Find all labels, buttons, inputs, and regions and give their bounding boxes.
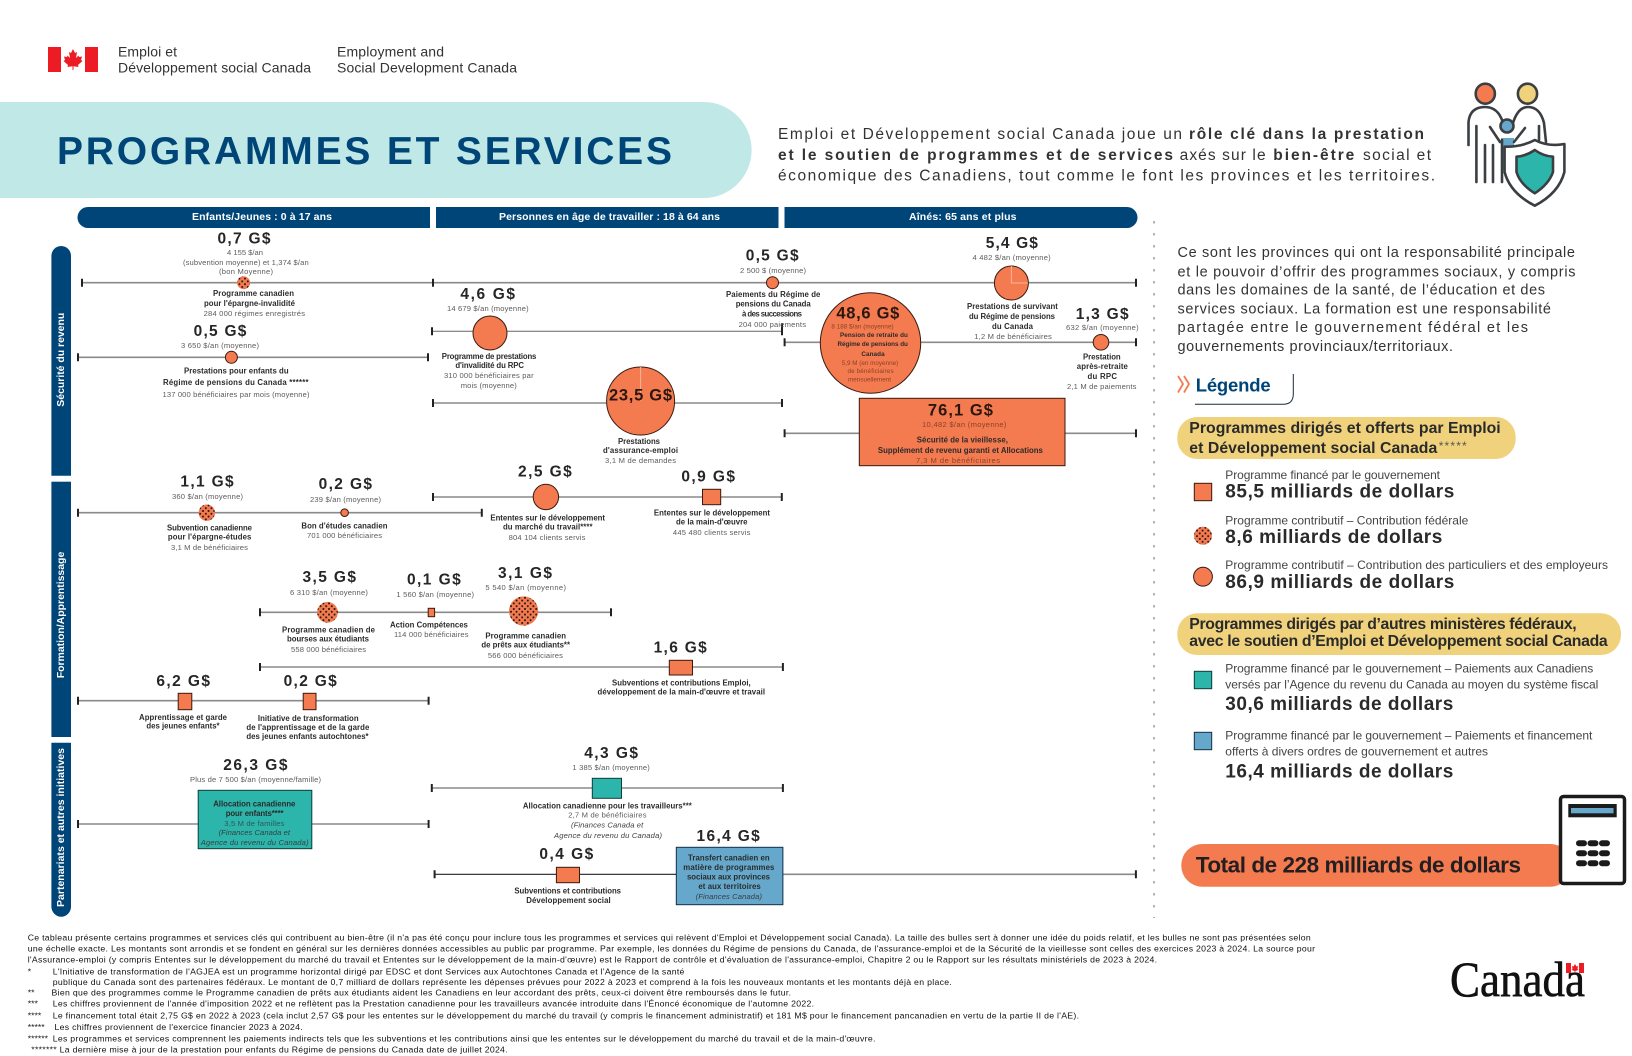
- icon: family with shield: [1468, 84, 1564, 206]
- program: Prestations d'assurance-emploi: Prestations: [618, 437, 661, 446]
- program: Programme canadien de bourses aux étudiants: 6 310 $/an (moyenne): [290, 588, 368, 597]
- legend group: programmes EDSC: *****: [1439, 439, 1467, 453]
- program: Sécurité de la vieillesse: [859, 398, 1065, 466]
- footnotes: ******: [28, 1034, 49, 1044]
- program: Transfert canadien en matière de programmes sociaux: 16,4 G$: [696, 828, 760, 845]
- timeline: transferts: [435, 870, 1136, 878]
- program: Transfert canadien en matière de programmes sociaux: Transfert canadien en: [688, 854, 770, 862]
- program: Subvention canadienne pour l'épargne-études: 360 $/an (moyenne): [172, 492, 243, 501]
- program: Programme canadien pour l'épargne-invalidité: [183, 230, 309, 318]
- footnotes: **: [28, 987, 35, 997]
- program: Allocation canadienne pour enfants: pour enfants****: [226, 809, 285, 818]
- program: Initiative de transformation AGJEA: de l'apprentissage et de la garde: [246, 723, 370, 732]
- legend group: autres ministères: [1177, 613, 1621, 655]
- program: Allocation canadienne pour enfants: Allocation canadienne: [213, 800, 296, 808]
- program: Allocation canadienne pour les travailleurs: Allocation canadienne pour les travailleurs***: [523, 802, 693, 810]
- program: Sécurité de la vieillesse: Sécurité de la vieillesse,: [917, 436, 1008, 444]
- program: Prestations de survivant du RPC: 5,4 G$: [986, 235, 1038, 252]
- program: Programme de prestations d'invalidité du RPC: 4,6 G$: [460, 286, 515, 303]
- program: Programme canadien pour l'épargne-invalidité: 284 000 régimes enregistrés: [204, 309, 305, 318]
- panel: Formation/Apprentissage: [51, 464, 783, 741]
- program: Programme canadien pour l'épargne-invalidité: pour l'épargne-invalidité: [204, 299, 296, 308]
- program: Prestations d'assurance-emploi: 3,1 M de demandes: [605, 456, 676, 465]
- program: Programme canadien de prêts aux étudiants: 5 540 $/an (moyenne): [485, 583, 566, 592]
- total callout: Total de 228 milliards de dollars: [1196, 852, 1521, 878]
- program: Programme canadien pour l'épargne-invalidité: Programme canadien: [213, 289, 294, 298]
- program: Prestation après-retraite du RPC: Prestation: [1083, 352, 1121, 362]
- program: Programme canadien de prêts aux étudiants: 566 000 bénéficiaires: [488, 651, 563, 660]
- program: Allocation canadienne pour les travailleurs: 1 385 $/an (moyenne): [572, 763, 650, 772]
- program: Prestation après-retraite du RPC: après-retraite: [1077, 362, 1129, 371]
- program: Prestations pour enfants du RPC: 3 650 $/an (moyenne): [181, 341, 259, 350]
- intro text: et le soutien de programmes et de services: [778, 147, 1173, 164]
- program: Allocation canadienne pour les travailleurs: (Finances Canada et: [571, 820, 644, 830]
- intro text: rôle clé dans la prestation: [1189, 126, 1424, 143]
- program: Ententes sur le développement du marché du travail: [490, 464, 605, 542]
- program: Bon d'études canadien: 0,2 G$: [319, 476, 372, 493]
- program: Transfert canadien en matière de programmes sociaux: matière de programmes: [683, 863, 775, 872]
- program: Prestation après-retraite du RPC: du RPC: [1088, 372, 1117, 381]
- program: Action Compétences: 0,1 G$: [407, 572, 461, 588]
- program: Ententes sur le développement du marché du travail: 804 104 clients servis: [509, 533, 586, 542]
- program: Ententes sur le développement du marché du travail: Ententes sur le développement: [490, 514, 605, 522]
- icon: calculator: [1560, 796, 1624, 884]
- program: Programme canadien de prêts aux étudiants: de prêts aux étudiants**: [481, 640, 571, 650]
- program: Bon d'études canadien: 239 $/an (moyenne): [310, 495, 381, 504]
- program: Allocation canadienne pour les travailleurs: 2,7 M de bénéficiaires: [568, 810, 647, 820]
- legend item: contribution fédérale: [1194, 513, 1469, 548]
- right text: responsabilité des provinces: gouvernements provinciaux/territoriaux.: [1178, 339, 1453, 355]
- program: Programme canadien de bourses aux étudiants: 558 000 bénéficiaires: [291, 645, 366, 654]
- title banner: [0, 102, 752, 198]
- program: Prestations pour enfants du RPC: Prestations pour enfants du: [184, 366, 289, 376]
- program: Sécurité de la vieillesse: 7,3 M de bénéficiaires: [916, 456, 1000, 465]
- program: Programme canadien pour l'épargne-invalidité: 4 155 $/an: [227, 248, 263, 257]
- footnotes: Les chiffres proviennent de l'exercice financier 2023 à 2024.: [54, 1022, 303, 1032]
- program: Sécurité de la vieillesse: 76,1 G$: [928, 402, 993, 420]
- program: Paiements du RPC à des successions: pensions du Canada: [736, 300, 811, 308]
- English department name: Employment and: [337, 44, 444, 60]
- intro text: axés sur le: [1180, 147, 1266, 164]
- header: Enfants/Jeunes: [78, 207, 430, 228]
- French department name: Emploi et: [118, 44, 177, 60]
- program: Allocation canadienne pour les travailleurs: 4,3 G$: [584, 745, 638, 762]
- legend item: paiements aux Canadiens: [1194, 662, 1598, 715]
- program: Prestations pour enfants du RPC: 0,5 G$: [194, 323, 247, 340]
- intro text: Emploi et Développement social Canada joue un: [778, 126, 1182, 143]
- program: Action Compétences: 1 560 $/an (moyenne): [396, 590, 474, 599]
- title: PROGRAMMES ET SERVICES: [57, 130, 672, 173]
- program: Subvention canadienne pour l'épargne-études: [167, 474, 253, 552]
- French department name: [118, 44, 311, 76]
- age group headers: [78, 207, 1138, 228]
- program: Programme de prestations d'invalidité du RPC: Programme de prestations: [442, 352, 537, 361]
- legend item: paiements aux Canadiens: Programme financé par le gouvernement – Paiements aux Canadiens: [1225, 662, 1593, 676]
- program: Pension de retraite du RPC: 8 188 $/an (moyenne): [831, 324, 894, 330]
- timeline: subventions Emploi: [260, 663, 783, 671]
- intro text: social et: [1363, 147, 1432, 164]
- header: Enfants/Jeunes: Enfants/Jeunes : 0 à 17 ans: [192, 211, 332, 223]
- program: Allocation canadienne pour enfants: 3,5 M de familles: [224, 819, 285, 828]
- legend item: contribution fédérale: 8,6 milliards de dollars: [1225, 527, 1442, 548]
- footnotes: ****: [28, 1010, 42, 1020]
- program: Subventions et contributions Développement social: Subventions et contributions: [514, 886, 622, 896]
- program: Programme canadien de prêts aux étudiants: 3,1 G$: [498, 565, 552, 582]
- program: Paiements du RPC à des successions: 0,5 G$: [746, 248, 799, 264]
- legend item: financé par le gouvernement: 85,5 milliards de dollars: [1225, 482, 1454, 502]
- program: Programme de prestations d'invalidité du RPC: 14 679 $/an (moyenne): [447, 304, 529, 313]
- French department name: Développement social Canada: [118, 60, 311, 76]
- legend item: paiements et financement: offerts à divers ordres de gouvernement et autres: [1225, 745, 1488, 759]
- program: Allocation canadienne pour les travailleurs: Agence du revenu du Canada): [553, 831, 662, 840]
- right text: responsabilité des provinces: dans les domaines de la santé, de l’éducation et des: [1178, 283, 1545, 299]
- timeline: jeunes enfants: [78, 697, 429, 705]
- timeline: prestations pour enfants: [78, 353, 428, 361]
- program: Allocation canadienne pour enfants: Plus de 7 500 $/an (moyenne/famille): [190, 775, 321, 784]
- program: Programme canadien de prêts aux étudiants: Programme canadien: [485, 632, 566, 640]
- intro text: bien-être: [1273, 147, 1355, 164]
- program: Prestations de survivant du RPC: du Régime de pensions: [969, 312, 1056, 321]
- program: Prestations de survivant du RPC: 1,2 M de bénéficiaires: [974, 332, 1052, 341]
- timeline: allocation canadienne pour enfants: [78, 820, 429, 828]
- program: Bon d'études canadien: Bon d'études canadien: [301, 522, 388, 530]
- program: Subventions et contributions Développement social: [514, 846, 622, 905]
- timeline: ligne supérieure: [82, 279, 1136, 287]
- program: Initiative de transformation AGJEA: des jeunes enfants autochtones*: [246, 732, 370, 741]
- footnotes: Le financement total était 2,75 G$ en 2022 à 2023 (cela inclut 2,57 G$ pour les ententes sur le développement du marché du travail (y compris le financement administratif) et 181 M$ pour le financement pancanadien en vertu de la partie II de l'AE).: [53, 1010, 1079, 1020]
- legend group: autres ministères: Programmes dirigés par d’autres ministères fédéraux,: [1189, 616, 1577, 633]
- footnotes: Les programmes et services comprennent les paiements indirects tels que les subventions et les contributions ainsi que les ententes sur le développement du marché du travail et de la main-d'œuvre.: [53, 1034, 875, 1044]
- program: Sécurité de la vieillesse: Supplément de revenu garanti et Allocations: [878, 446, 1044, 455]
- footnotes: Les chiffres proviennent de l'année d'imposition 2022 et ne reflètent pas la Prestation canadienne pour les travailleurs avancée introduite dans l'Énoncé économique de l'automne 2022.: [53, 999, 814, 1009]
- program: Initiative de transformation AGJEA: 0,2 G$: [284, 673, 337, 690]
- legend group: programmes EDSC: [1177, 417, 1516, 459]
- program: Paiements du RPC à des successions: à des successions: [742, 310, 803, 318]
- legend heading: Légende: [1196, 374, 1271, 396]
- program: Subventions et contributions Emploi: [598, 640, 765, 696]
- program: Paiements du RPC à des successions: Paiements du Régime de: [726, 290, 821, 299]
- program: Prestation après-retraite du RPC: 2,1 M de paiements: [1067, 382, 1137, 391]
- legend item: paiements et financement: 16,4 milliards de dollars: [1225, 762, 1453, 782]
- program: Prestation après-retraite du RPC: 632 $/an (moyenne): [1066, 323, 1139, 332]
- program: Pension de retraite du RPC: 48,6 G$: [836, 304, 899, 322]
- program: Apprentissage et garde des jeunes enfants: [139, 673, 228, 730]
- footnotes: [28, 932, 1315, 1055]
- program: Pension de retraite du RPC: 5,9 M (en moyenne): [842, 360, 898, 367]
- timeline: pension de retraite: [785, 338, 1136, 346]
- program: Ententes sur le développement du marché du travail: 2,5 G$: [518, 464, 572, 480]
- header: Personnes en âge de travailler: [436, 207, 778, 228]
- logo: Canada wordmark: Canada: [1450, 951, 1585, 1007]
- program: Bon d'études canadien: 701 000 bénéficiaires: [307, 531, 382, 540]
- timeline: sécurité de la vieillesse: [785, 429, 1136, 437]
- header: Personnes en âge de travailler: Personnes en âge de travailler : 18 à 64 ans: [499, 211, 720, 223]
- program: Subventions et contributions Emploi: 1,6 G$: [654, 640, 707, 656]
- legend item: contribution des particuliers: 86,9 milliards de dollars: [1225, 572, 1454, 593]
- legend item: paiements aux Canadiens: 30,6 milliards de dollars: [1225, 694, 1453, 715]
- program: Subventions et contributions Emploi: développement de la main-d'œuvre et travail: [598, 688, 765, 696]
- program: Paiements du RPC à des successions: 2 500 $ (moyenne): [740, 266, 806, 275]
- right text: responsabilité des provinces: et le pouvoir d’offrir des programmes sociaux, y compris: [1178, 264, 1576, 280]
- program: Subvention canadienne pour l'épargne-études: pour l'épargne-études: [168, 532, 252, 542]
- intro text: économique des Canadiens, tout comme le font les provinces et les territoires.: [778, 168, 1435, 184]
- program: Subvention canadienne pour l'épargne-études: Subvention canadienne: [167, 524, 253, 532]
- program: Ententes sur le développement du marché du travail: du marché du travail****: [503, 522, 593, 532]
- program: Programme de prestations d'invalidité du RPC: 310 000 bénéficiaires par: [444, 371, 534, 380]
- footnotes: Bien que des programmes comme le Programme canadien de prêts aux étudiants aident les Canadiens en leur accordant des prêts, ceux-ci doivent être remboursés dans le futur.: [52, 987, 791, 997]
- program: Programme de prestations d'invalidité du RPC: d'invalidité du RPC: [455, 361, 524, 370]
- program: Initiative de transformation AGJEA: Initiative de transformation: [258, 714, 359, 723]
- legend item: contribution fédérale: Programme contributif – Contribution fédérale: [1225, 513, 1469, 527]
- footnotes: *: [28, 967, 32, 977]
- program: Action Compétences: Action Compétences: [390, 620, 469, 630]
- right text: responsabilité des provinces: services sociaux. La formation est une responsabilité: [1178, 301, 1551, 317]
- total callout: [1181, 844, 1571, 887]
- timeline: études postsecondaires: [260, 608, 611, 616]
- footnotes: *****: [28, 1022, 45, 1032]
- footnotes: Ce tableau présente certains programmes et services clés qui contribuent au bien-être (il n'a pas été conçu pour inclure tous les programmes et services qui relèvent d'Emploi et Développement social Canada). La taille des bulles sert à donner une idée du poids relatif, et les bulles ne sont pas présentées selon: [28, 932, 1311, 942]
- program: Prestations de survivant du RPC: 4 482 $/an (moyenne): [972, 253, 1051, 262]
- program: Prestations pour enfants du RPC: Régime de pensions du Canada ******: [163, 378, 310, 387]
- footnotes: l'Assurance-emploi (y compris Ententes sur le développement du marché du travail et Ententes sur le développement de la main-d'œuvre) est le Rapport de contrôle et d'évaluation de l'assurance-emploi, Chapitre 2 ou le Rapport sur les résultats ministériels de 2023 à 2024.: [28, 954, 1157, 964]
- footnotes: L'Initiative de transformation de l'AGJEA est un programme horizontal dirigé par EDSC et dont Services aux Autochtones Canada et l'Agence de la santé: [53, 967, 685, 977]
- footnotes: ***: [28, 999, 38, 1009]
- legend item: paiements et financement: [1194, 729, 1593, 782]
- English department name: [337, 44, 517, 76]
- program: Transfert canadien en matière de programmes sociaux: [676, 828, 783, 905]
- program: Prestation après-retraite du RPC: 1,3 G$: [1076, 306, 1129, 323]
- program: Subventions et contributions Emploi: Subventions et contributions Emploi,: [612, 678, 751, 688]
- legend heading: [1178, 374, 1293, 404]
- program: Ententes sur le développement de la main-d'œuvre: 0,9 G$: [681, 468, 735, 486]
- program: Allocation canadienne pour enfants: 26,3 G$: [223, 757, 288, 774]
- intro text: [778, 126, 1435, 184]
- footnotes: ******* La dernière mise à jour de la prestation pour enfants du Régime de pensions du Canada date de juillet 2024.: [31, 1045, 508, 1055]
- program: Transfert canadien en matière de programmes sociaux: et aux territoires: [698, 882, 761, 891]
- legend: [1177, 374, 1621, 782]
- logo: Emploi et Développement social Canada signature: [48, 44, 517, 76]
- program: Subventions et contributions Développement social: Développement social: [526, 896, 611, 905]
- legend group: autres ministères: avec le soutien d’Emploi et Développement social Canada: [1189, 633, 1608, 650]
- program: Programme de prestations d'invalidité du RPC: mois (moyenne): [461, 381, 517, 390]
- program: Pension de retraite du RPC: Pension de retraite du: [840, 332, 908, 339]
- English department name: Social Development Canada: [337, 60, 517, 76]
- program: Bon d'études canadien: [301, 476, 388, 540]
- timeline: épargne-études: [78, 509, 482, 517]
- program: Programme canadien de prêts aux étudiants: [481, 565, 571, 660]
- program: Allocation canadienne pour enfants: (Finances Canada et: [219, 828, 291, 837]
- program: Transfert canadien en matière de programmes sociaux: (Finances Canada): [696, 892, 762, 901]
- program: Apprentissage et garde des jeunes enfants: des jeunes enfants*: [146, 722, 221, 730]
- timeline: assurance-emploi: [433, 399, 782, 407]
- side label: Formation/Apprentissage: [51, 482, 71, 737]
- program: Programme canadien de bourses aux étudiants: Programme canadien de: [282, 626, 376, 634]
- program: Pension de retraite du RPC: mensuellement: [848, 376, 891, 384]
- timeline: allocation pour les travailleurs: [432, 784, 783, 792]
- legend item: financé par le gouvernement: [1194, 468, 1454, 502]
- program: Apprentissage et garde des jeunes enfants: Apprentissage et garde: [139, 713, 228, 722]
- footnotes: publique du Canada sont des partenaires fédéraux. Le montant de 0,7 milliard de dollars représente les dépenses prévues pour 2022 à 2023 et comprend à la fois les nouveaux montants et les montants déjà en place.: [53, 977, 952, 987]
- legend group: programmes EDSC: Programmes dirigés et offerts par Emploi: [1189, 420, 1501, 437]
- program: Ententes sur le développement de la main-d'œuvre: 445 480 clients servis: [673, 528, 751, 537]
- timeline: prestations d'invalidité: [432, 323, 782, 335]
- side label: Formation/Apprentissage: Formation/Apprentissage: [55, 552, 67, 678]
- program: Paiements du RPC à des successions: [726, 248, 821, 329]
- legend item: financé par le gouvernement: Programme financé par le gouvernement: [1225, 468, 1441, 482]
- program: Pension de retraite du RPC: Régime de pensions du: [838, 341, 908, 348]
- side label: Sécurité du revenu: Sécurité du revenu: [55, 313, 67, 407]
- program: Transfert canadien en matière de programmes sociaux: sociaux aux provinces: [687, 872, 771, 882]
- program: Paiements du RPC à des successions: 204 000 paiements: [739, 320, 806, 329]
- program: Programme canadien pour l'épargne-invalidité: (subvention moyenne) et 1,374 $/an: [183, 258, 309, 267]
- panel: Sécurité du revenu: [51, 230, 1139, 476]
- right text: responsabilité des provinces: Ce sont les provinces qui ont la responsabilité principale: [1178, 245, 1575, 261]
- header: Aînés: [784, 207, 1138, 228]
- legend item: paiements et financement: Programme financé par le gouvernement – Paiements et financement: [1225, 729, 1593, 743]
- program: Initiative de transformation AGJEA: [246, 673, 370, 741]
- program: Ententes sur le développement de la main-d'œuvre: [654, 468, 770, 537]
- legend item: contribution des particuliers: [1194, 558, 1608, 593]
- program: Prestations d'assurance-emploi: [603, 367, 678, 465]
- program: Subventions et contributions Développement social: 0,4 G$: [539, 846, 594, 863]
- side label: Partenariats et autres initiatives: [51, 743, 71, 917]
- program: Ententes sur le développement de la main-d'œuvre: Ententes sur le développement: [654, 508, 770, 518]
- program: Programme canadien de bourses aux étudiants: 3,5 G$: [302, 569, 356, 586]
- program: Prestation après-retraite du RPC: [1066, 306, 1139, 391]
- legend item: contribution des particuliers: Programme contributif – Contribution des particuliers et des employeurs: [1225, 558, 1608, 572]
- program: Prestations d'assurance-emploi: d'assurance-emploi: [603, 446, 678, 455]
- program: Prestations de survivant du RPC: du Canada: [992, 322, 1034, 331]
- program: Prestations de survivant du RPC: Prestations de survivant: [967, 302, 1058, 311]
- program: Pension de retraite du RPC: de bénéficiaires: [848, 368, 894, 375]
- program: Prestations pour enfants du RPC: [162, 323, 310, 399]
- program: Allocation canadienne pour enfants: Agence du revenu du Canada): [200, 838, 309, 847]
- header: Aînés: Aînés: 65 ans et plus: [909, 211, 1017, 223]
- right text: responsabilité des provinces: partagée entre le gouvernement fédéral et les: [1178, 320, 1528, 336]
- program: Programme canadien pour l'épargne-invalidité: (bon Moyenne): [219, 267, 273, 276]
- program: Prestations pour enfants du RPC: 137 000 bénéficiaires par mois (moyenne): [162, 390, 310, 399]
- side label: Sécurité du revenu: [51, 246, 71, 476]
- program: Allocation canadienne pour enfants: [190, 757, 321, 849]
- program: Subvention canadienne pour l'épargne-études: 1,1 G$: [180, 474, 234, 490]
- program: Action Compétences: [390, 572, 474, 639]
- side label: Partenariats et autres initiatives: Partenariats et autres initiatives: [55, 748, 67, 907]
- program: Programme canadien de bourses aux étudiants: [282, 569, 376, 654]
- timeline: ententes: [433, 493, 782, 501]
- program: Programme canadien de bourses aux étudiants: bourses aux étudiants: [287, 634, 370, 644]
- program: Pension de retraite du RPC: [820, 293, 921, 393]
- legend item: paiements aux Canadiens: versés par l’Agence du revenu du Canada au moyen du système fiscal: [1225, 678, 1598, 692]
- program: Sécurité de la vieillesse: 10,482 $/an (moyenne): [922, 420, 1007, 429]
- program: Pension de retraite du RPC: Canada: [861, 351, 885, 358]
- program: Prestations d'assurance-emploi: 23,5 G$: [609, 386, 672, 404]
- program: Programme de prestations d'invalidité du RPC: [442, 286, 537, 390]
- program: Ententes sur le développement de la main-d'œuvre: de la main-d'œuvre: [676, 518, 748, 526]
- icon: Canadian flag: [48, 47, 98, 72]
- program: Programme canadien pour l'épargne-invalidité: 0,7 G$: [218, 230, 271, 248]
- program: Apprentissage et garde des jeunes enfants: 6,2 G$: [156, 673, 210, 690]
- legend group: programmes EDSC: et Développement social Canada: [1189, 440, 1438, 457]
- program: Subvention canadienne pour l'épargne-études: 3,1 M de bénéficiaires: [171, 543, 248, 552]
- panel: Partenariats et autres initiatives: [51, 743, 1136, 917]
- footnotes: une échelle exacte. Les montants sont arrondis et se fondent en général sur les dernières données accessibles au public par programme. Par exemple, les données du Régime de pensions du Canada, de l'assurance-emploi et de la Sécurité de la vieillesse sont celles des exercices 2023 à 2024. La source pour: [28, 943, 1315, 953]
- program: Action Compétences: 114 000 bénéficiaires: [394, 630, 469, 639]
- program: Allocation canadienne pour les travailleurs: [523, 745, 693, 840]
- right text: responsabilité des provinces: [1178, 245, 1576, 355]
- program: Prestations de survivant du RPC: [967, 235, 1058, 341]
